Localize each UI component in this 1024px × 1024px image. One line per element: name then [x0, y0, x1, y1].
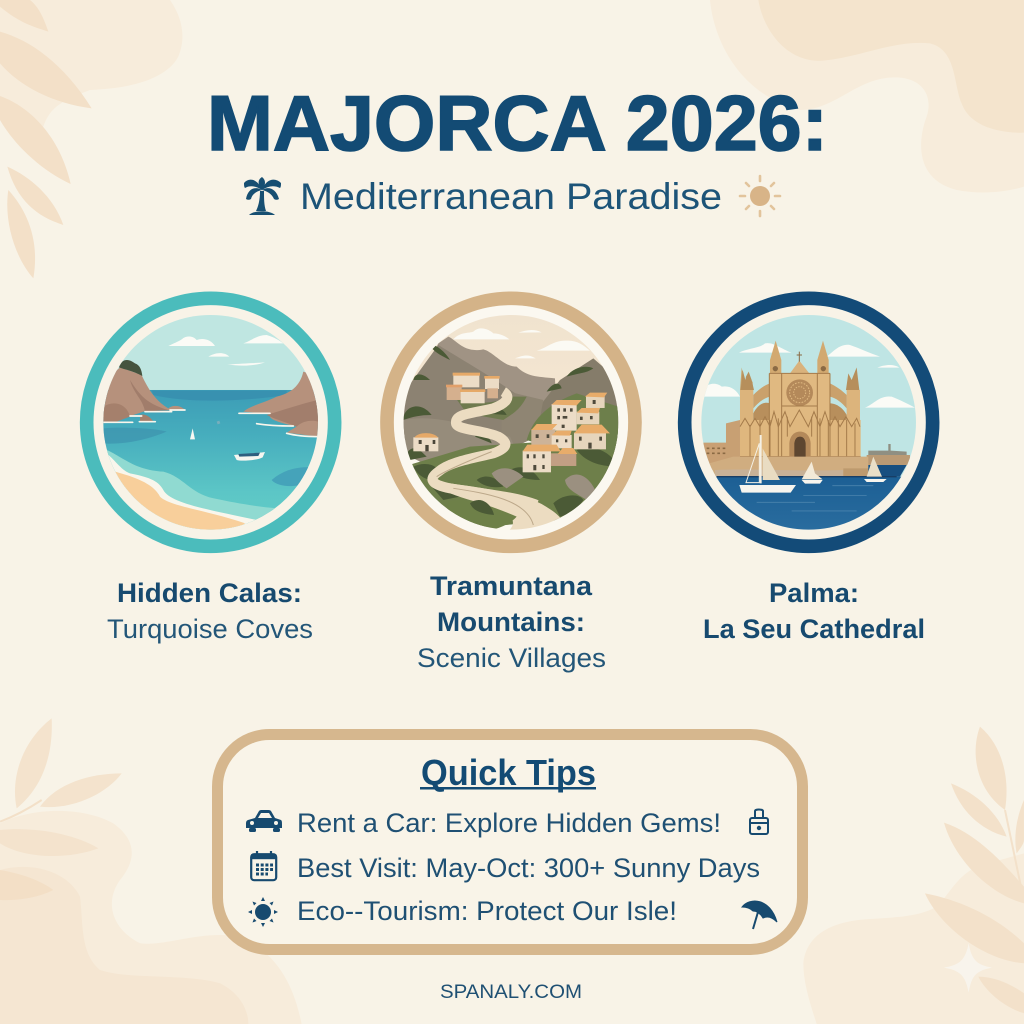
- decoration: bottom-left blobs and leaves: [0, 718, 302, 1024]
- panel: tramuntana mountains: [387, 298, 635, 673]
- tips box: [218, 734, 802, 950]
- icon: sun: [248, 897, 278, 927]
- subtitle text: Mediterranean Paradise: [300, 176, 722, 217]
- boats: [739, 435, 887, 493]
- label: palma: Palma:: [769, 578, 859, 608]
- houses: upper village: [446, 373, 500, 403]
- decoration: bottom-right blob, leaves and sparkle: [803, 727, 1024, 1024]
- tip: best visit: Best Visit: May-Oct: 300+ Sunny Days: [297, 853, 760, 883]
- tip: eco-tourism: Eco--Tourism: Protect Our Isle!: [297, 896, 677, 926]
- panel: hidden calas: [81, 292, 341, 644]
- icon: car: [246, 810, 282, 832]
- illustration: mountain village road: [387, 298, 635, 546]
- icon: luggage: [750, 810, 768, 834]
- panel: quick tips: [218, 734, 802, 950]
- footer: SPANALY.COM: [440, 982, 582, 1003]
- label: palma: [703, 578, 925, 644]
- label: hidden calas: Turquoise Coves: [107, 614, 313, 644]
- houses: lone house: [413, 433, 438, 451]
- cathedral building: [740, 341, 861, 457]
- tip: eco-tourism: [248, 896, 777, 929]
- illustration: la seu cathedral: [685, 298, 933, 546]
- label: tramuntana mountains: Mountains:: [437, 607, 585, 637]
- icon: sun: [740, 176, 780, 216]
- panel: palma: [685, 298, 933, 644]
- decoration: top-left blob and leaves: [0, 0, 182, 278]
- houses: lower village: [523, 393, 610, 472]
- label: palma: La Seu Cathedral: [703, 614, 925, 644]
- icon: beach umbrella: [742, 901, 777, 929]
- label: tramuntana mountains: Tramuntana: [430, 571, 593, 601]
- icon: calendar: [251, 851, 276, 880]
- tips heading: Quick Tips: [421, 752, 596, 793]
- label: tramuntana mountains: Scenic Villages: [417, 643, 606, 673]
- label: hidden calas: Hidden Calas:: [117, 578, 302, 608]
- icon: palm tree: [244, 177, 281, 215]
- subtitle row: [244, 176, 780, 217]
- decoration: top-right blobs: [710, 0, 1024, 192]
- illustration: turquoise cove: [81, 292, 341, 552]
- title: MAJORCA 2026:: [207, 79, 828, 167]
- tip: rent a car: Rent a Car: Explore Hidden Gems!: [297, 808, 721, 838]
- label: hidden calas: [107, 578, 313, 644]
- label: tramuntana mountains: [417, 571, 606, 673]
